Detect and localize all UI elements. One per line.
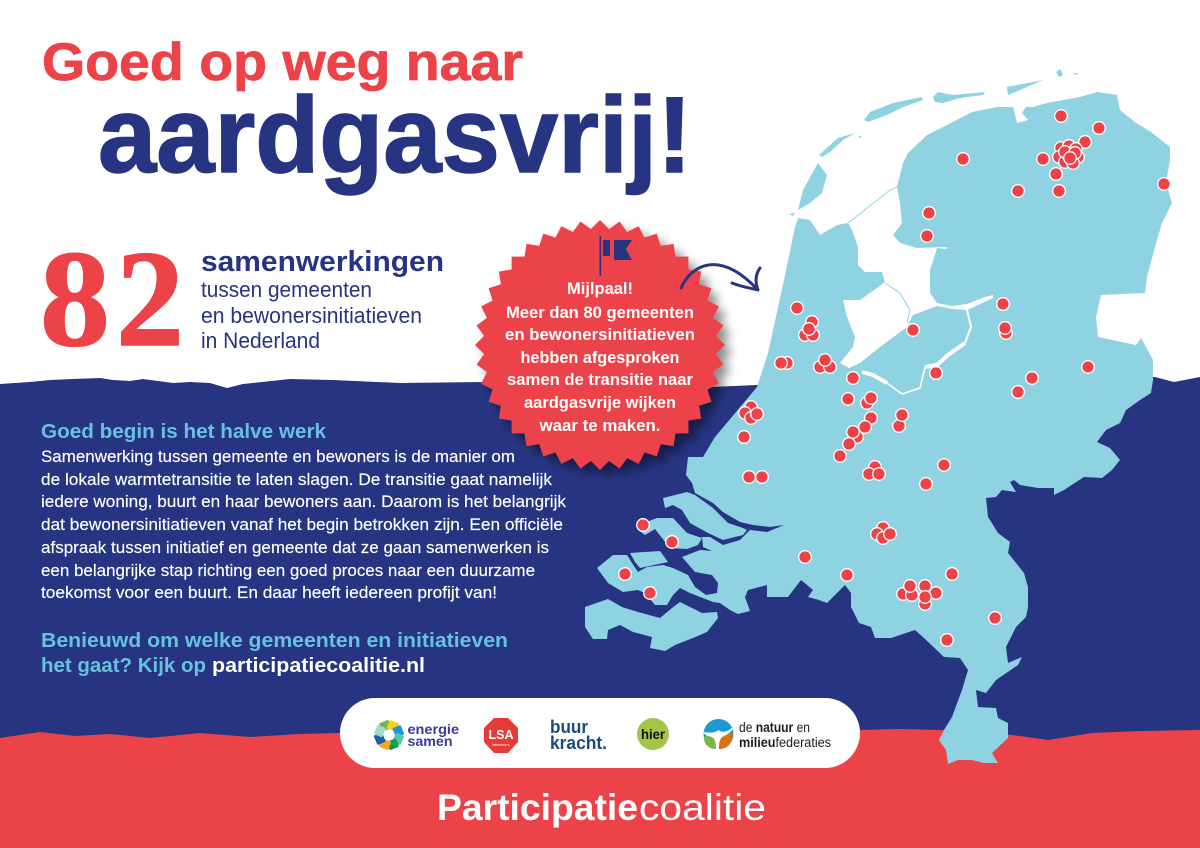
arrow to map xyxy=(681,265,760,290)
logo: energie samen xyxy=(374,720,460,750)
red bottom band xyxy=(0,729,1200,848)
map of the Netherlands xyxy=(585,69,1172,764)
call to action: Benieuwd om welke gemeenten en initiatieven xyxy=(41,629,508,652)
logo: LSA bewoners xyxy=(484,718,518,753)
burst shape xyxy=(475,220,725,470)
map: Lauwersmeer xyxy=(1013,105,1028,123)
logo: de natuur en milieufederaties xyxy=(703,719,831,750)
subheading: samenwerkingen: tussen gemeenten xyxy=(201,277,372,302)
burst text xyxy=(505,280,695,435)
logo: LSA bewoners: bewoners xyxy=(492,742,510,747)
map: Noord-Beveland xyxy=(630,551,668,568)
body text: dat bewonersinitiatieven vanaf het begin betrokken zijn. Een officiële xyxy=(41,516,563,534)
navy middle band xyxy=(0,377,1200,740)
map: Zeeuws-Vlaanderen xyxy=(585,599,718,651)
title xyxy=(42,33,692,195)
burst text: waar te maken. xyxy=(538,417,660,435)
logo: hier: hier xyxy=(641,727,666,742)
bird emblem xyxy=(703,719,734,749)
icon: flag xyxy=(600,236,632,276)
logo: LSA bewoners: LSA xyxy=(488,728,514,742)
wordmark: energie xyxy=(408,722,460,737)
map: Goeree-Overflakkee xyxy=(663,492,747,540)
wordmark: de natuur en xyxy=(739,720,810,735)
body text: toekomst voor een buurt. En daar heeft iedereen profijt van! xyxy=(41,584,497,602)
wordmark xyxy=(408,722,460,749)
subheading: samenwerkingen: samenwerkingen xyxy=(201,246,444,278)
body text: Samenwerking tussen gemeente en bewoners is de manier om xyxy=(41,448,515,466)
burst text: samen de transitie naar xyxy=(507,371,694,389)
big number 82: 2 xyxy=(116,222,184,375)
logo: buurkracht xyxy=(550,716,607,753)
logo pill xyxy=(340,698,860,768)
map: Wadden islands xyxy=(789,69,1078,216)
title line 1: Goed op weg naar xyxy=(42,33,523,92)
map: red location dots xyxy=(619,110,1170,646)
subheading: samenwerkingen: en bewonersinitiatieven xyxy=(201,303,422,328)
body text: de lokale warmtetransitie te laten slagen. De transitie gaat namelijk xyxy=(41,471,553,489)
wordmark: samen xyxy=(408,734,452,749)
call to action: participatiecoalitie.nl xyxy=(212,654,425,677)
subheading: samenwerkingen: in Nederland xyxy=(201,328,320,353)
call to action xyxy=(41,629,508,677)
call to action: het gaat? Kijk op xyxy=(41,654,206,677)
burst text: Meer dan 80 gemeenten xyxy=(506,304,694,322)
body text xyxy=(41,448,567,602)
map: Schouwen-Duiveland xyxy=(638,518,702,549)
burst text: Mijlpaal! xyxy=(567,280,633,298)
logo: hier xyxy=(637,718,669,750)
big number 82 xyxy=(40,222,184,375)
wordmark xyxy=(739,720,831,750)
burst text: hebben afgesproken xyxy=(520,349,680,367)
burst text: aardgasvrije wijken xyxy=(524,394,676,412)
logo: buurkracht: kracht. xyxy=(550,732,607,753)
subheading: samenwerkingen xyxy=(201,246,444,353)
footer wordmark: Participatie xyxy=(437,787,638,828)
body heading: Goed begin is het halve werk xyxy=(41,421,327,443)
footer wordmark: coalitie xyxy=(639,787,766,828)
wheel icon xyxy=(374,720,404,750)
big number 82: 8 xyxy=(40,222,110,375)
map: Flevoland channel xyxy=(862,310,971,394)
footer wordmark xyxy=(437,787,766,828)
body text: afspraak tussen initiatief en gemeente dat ze gaan samenwerken is xyxy=(41,539,549,557)
wordmark: milieufederaties xyxy=(739,735,831,750)
map: mainland xyxy=(597,92,1172,764)
body text: iedere woning, buurt en haar bewoners aan. Daarom is het belangrijk xyxy=(41,493,567,511)
body text: een belangrijke stap richting een goed proces naar een duurzame xyxy=(41,562,535,580)
burst text: en bewonersinitiatieven xyxy=(505,326,695,344)
map: Afsluitdijk and Houtribdijk xyxy=(848,187,910,323)
title line 2: aardgasvrij! xyxy=(98,74,692,195)
logo: buurkracht: buur xyxy=(550,716,588,737)
milestone burst xyxy=(475,220,725,470)
